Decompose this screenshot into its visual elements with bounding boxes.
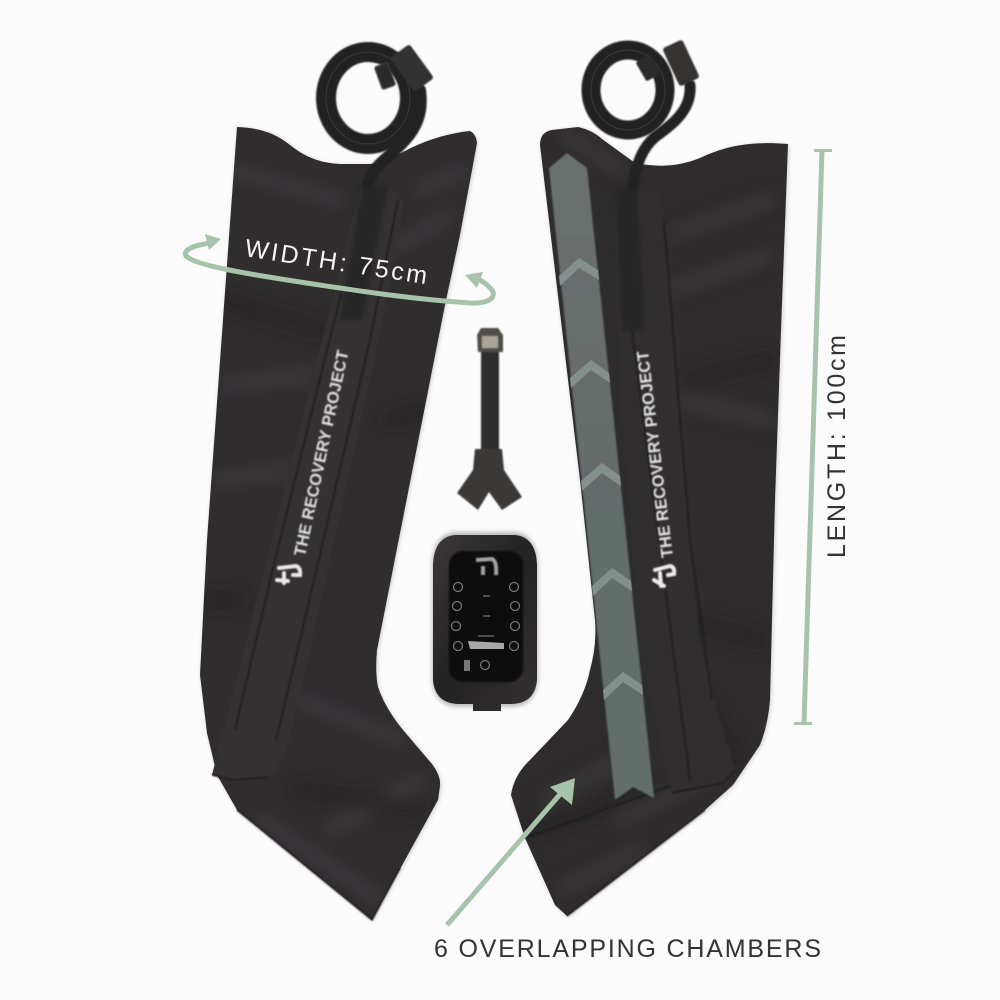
left flap seams — [212, 200, 398, 780]
length measure — [794, 149, 851, 725]
width arrowhead left — [205, 234, 221, 250]
controller shadow — [432, 532, 538, 707]
controller base tab — [473, 704, 501, 711]
right cord tail — [633, 85, 690, 186]
left brand text: THE RECOVERY PROJECT — [290, 348, 353, 558]
length label: LENGTH: 100cm — [823, 335, 851, 558]
right plug — [636, 54, 660, 82]
left boot wrinkles — [204, 164, 425, 606]
right brand text: THE RECOVERY PROJECT — [633, 349, 677, 559]
left boot hem — [237, 810, 400, 920]
right cord — [591, 39, 700, 186]
right cord ring groove — [591, 50, 665, 130]
left cord ring — [326, 52, 410, 144]
connector plug face — [482, 336, 498, 348]
right strip tube — [615, 187, 645, 330]
controller level bar — [468, 641, 504, 649]
left plug — [374, 62, 396, 90]
chambers label: 6 OVERLAPPING CHAMBERS — [434, 935, 821, 963]
controller buttons — [452, 582, 520, 670]
left cord tail — [368, 90, 421, 184]
length top cap — [814, 149, 832, 152]
right boot shadow — [512, 128, 789, 917]
controller battery icon — [464, 660, 470, 671]
left strip tube — [340, 183, 388, 320]
connector Y split — [457, 449, 522, 510]
right inline box — [662, 39, 700, 87]
right logo — [654, 566, 674, 586]
controller — [432, 532, 538, 711]
chamber divider 5 — [603, 672, 643, 700]
chamber divider 4 — [592, 568, 632, 596]
chevron strip band — [549, 153, 654, 800]
length bottom cap — [794, 722, 812, 725]
infographic — [182, 39, 845, 957]
controller body — [433, 535, 537, 704]
left boot body — [200, 127, 477, 920]
chamber divider 2 — [570, 360, 610, 388]
chambers arrowhead — [550, 778, 575, 805]
chambers callout — [434, 778, 821, 963]
right boot hem — [525, 770, 715, 916]
left boot flap — [212, 183, 403, 780]
left logo — [277, 566, 300, 583]
Y connector — [457, 328, 522, 510]
width arrowhead right — [465, 272, 483, 288]
chamber divider 3 — [581, 463, 621, 491]
width measure — [185, 234, 493, 303]
right boot — [511, 127, 789, 917]
controller logo — [476, 559, 496, 575]
left cord ring groove — [326, 52, 410, 144]
chamber divider 1 — [559, 258, 599, 286]
right flap seams — [632, 222, 735, 793]
right boot body — [511, 127, 788, 916]
chambers arrow line — [447, 792, 562, 925]
left boot — [200, 127, 478, 921]
chevron strip: 6 chambers — [549, 153, 654, 800]
length line — [804, 150, 822, 723]
connector strap — [481, 352, 499, 450]
right cord ring — [591, 50, 665, 130]
width arrow curve — [185, 243, 493, 303]
right boot flap — [613, 187, 735, 793]
left cord — [326, 44, 434, 184]
left inline box — [390, 44, 434, 92]
controller screen — [449, 551, 523, 682]
width label: WIDTH: 75cm — [243, 234, 429, 290]
controller dashes — [478, 596, 494, 636]
right boot wrinkles — [558, 128, 568, 130]
connector plug head — [477, 328, 503, 352]
left boot shadow — [201, 128, 478, 921]
